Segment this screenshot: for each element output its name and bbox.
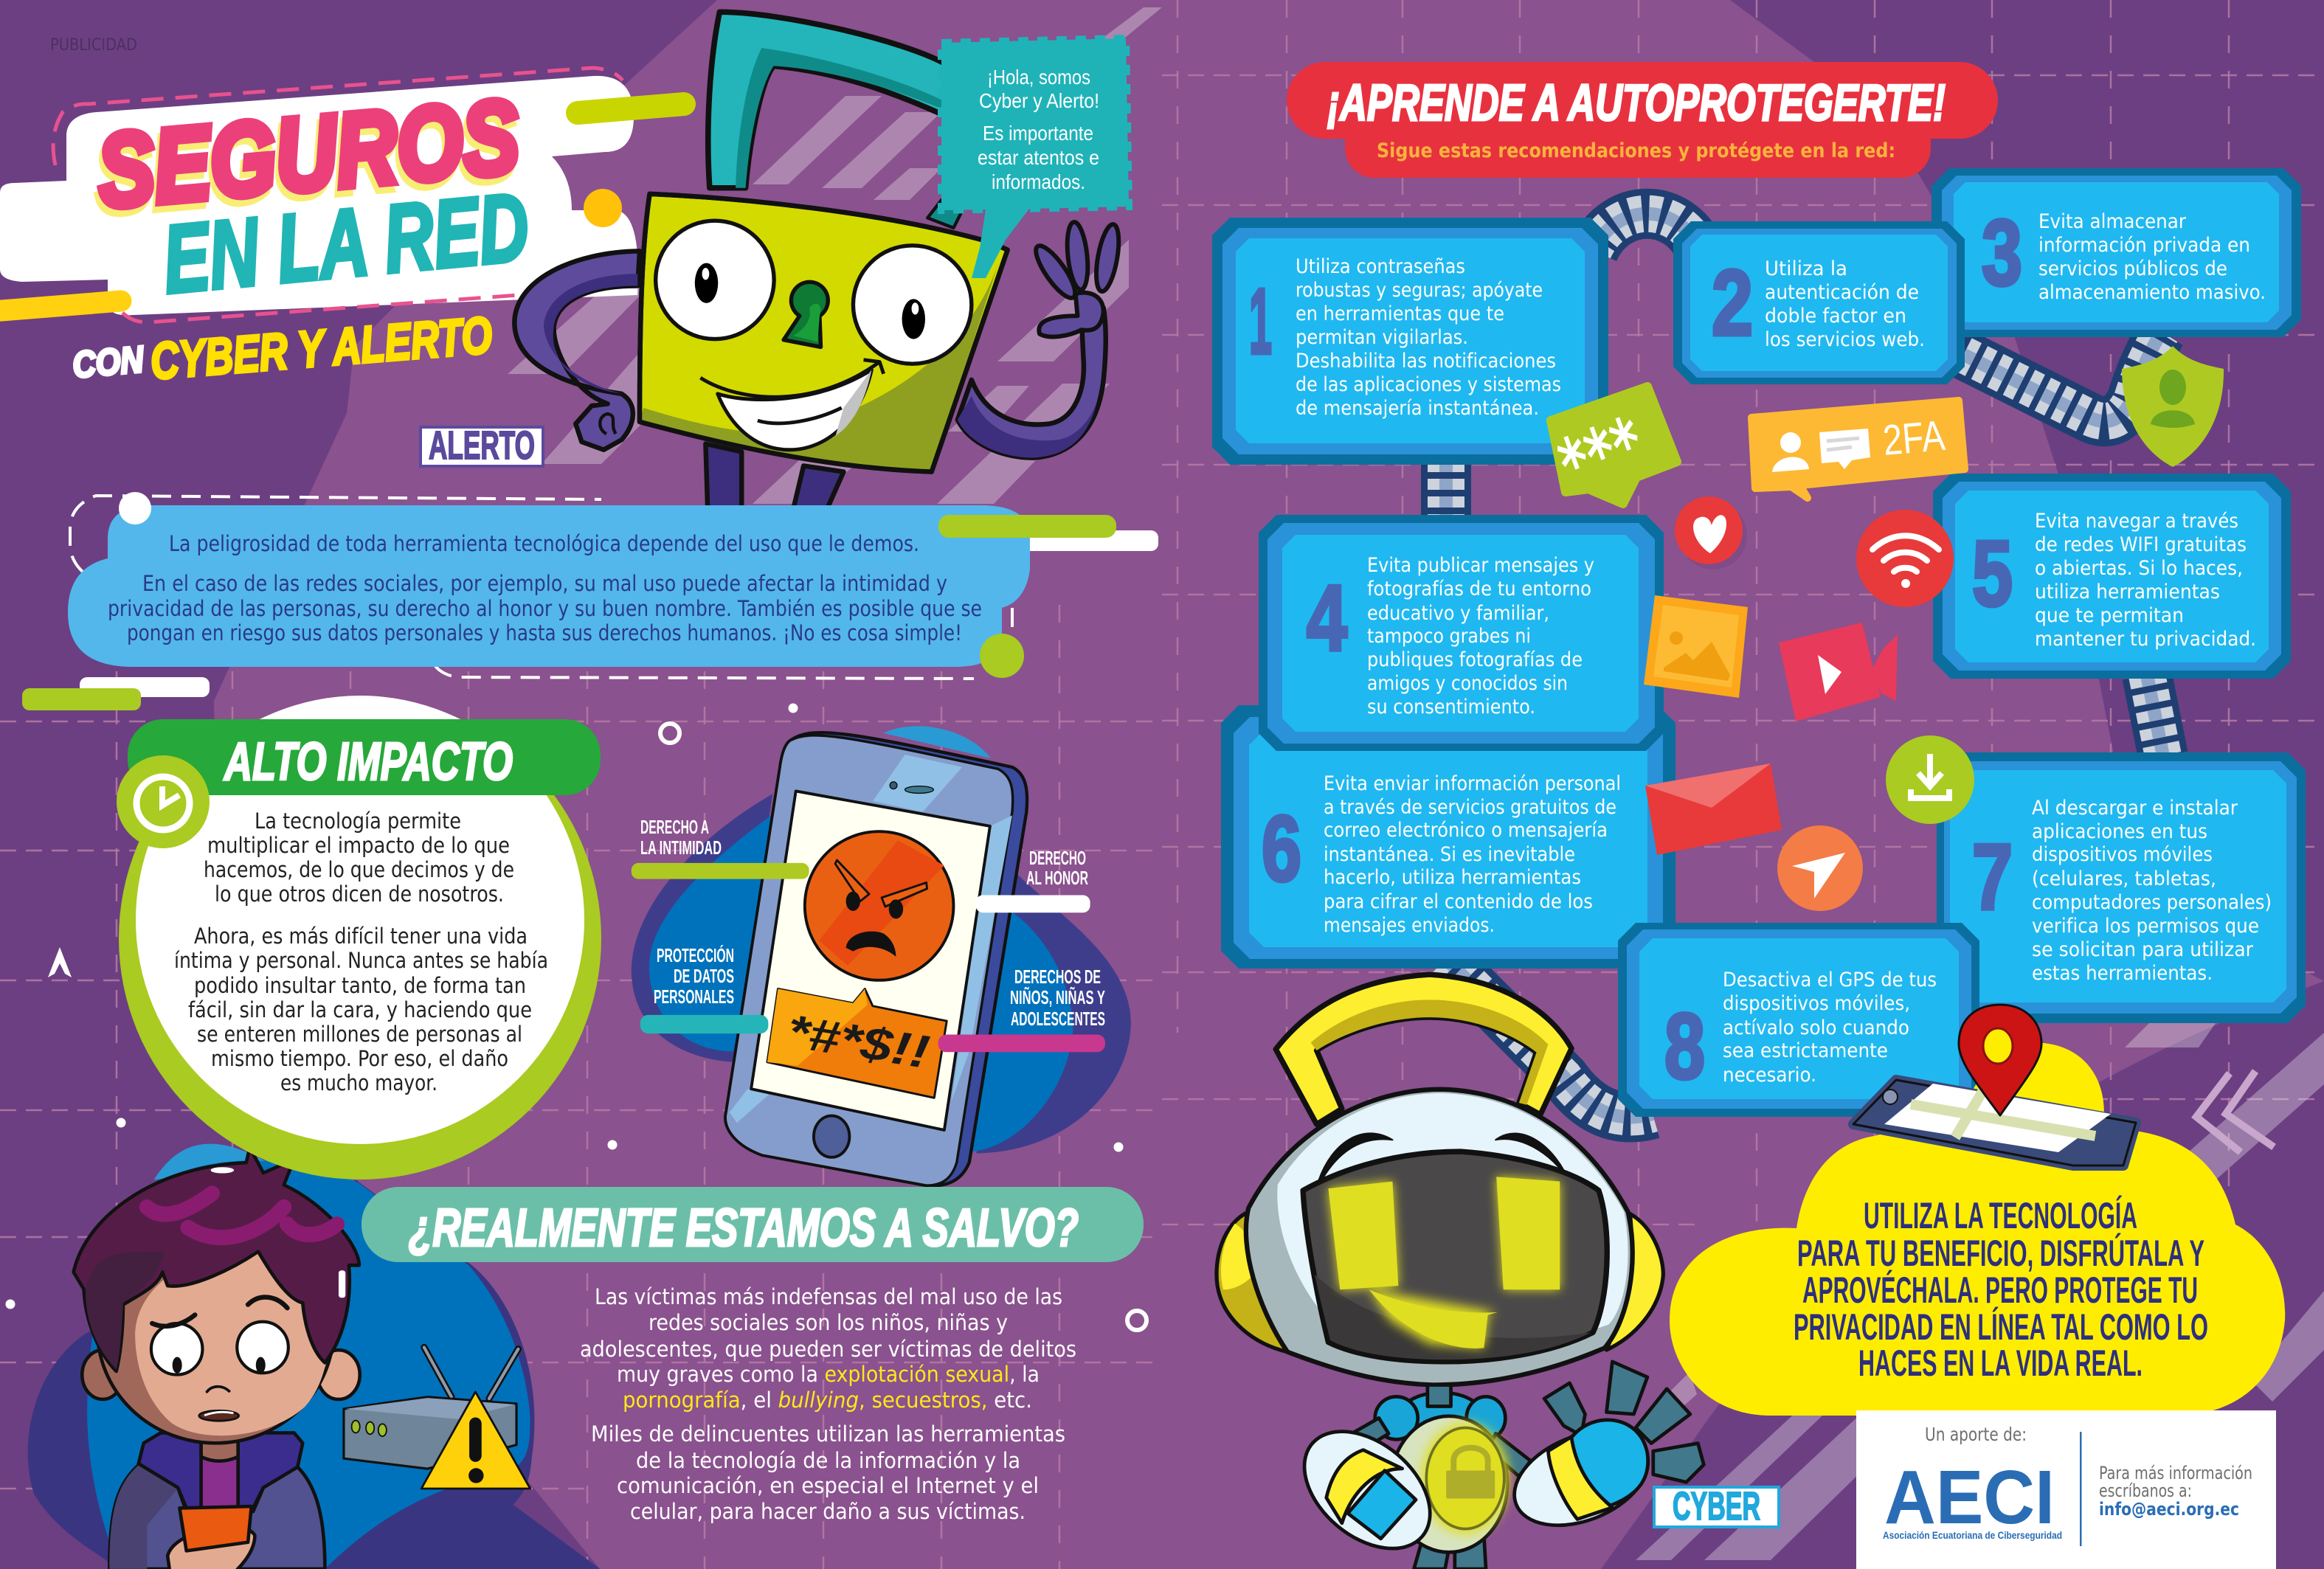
heading: alto impacto (128, 719, 601, 795)
step 1 card: Deshabilita las notificaciones (1296, 350, 1556, 373)
step 5 card: utiliza herramientas (2035, 581, 2220, 603)
step 1 card: robustas y seguras; apóyate (1296, 279, 1543, 302)
subtitle: con cyber y alerto (71, 306, 494, 390)
step 7 card: (celulares, tabletas, (2032, 867, 2216, 890)
step 7 card: verifica los permisos que (2032, 915, 2259, 938)
contact: escríbanos a: (2099, 1480, 2192, 1501)
phone body (725, 732, 1027, 1185)
step 3 card: 3 (1982, 201, 2022, 305)
illustration: Cyber robot (1217, 974, 1704, 1569)
title backdrop (0, 76, 638, 315)
title line: en la red: EN LA RED (159, 173, 533, 314)
title line: seguros: SEGUROS (90, 84, 520, 236)
step 2 card: doble factor en (1765, 305, 1906, 328)
alto impacto text: La tecnología permite (255, 808, 461, 834)
speech bubble text: informados. (992, 170, 1085, 193)
alto impacto text: es mucho mayor. (280, 1070, 438, 1095)
step 7 card: computadores personales) (2032, 891, 2272, 914)
speech bubble: Alerto (941, 38, 1129, 278)
name tag: Alerto (421, 423, 543, 468)
step 4 card: tampoco grabes ni (1367, 625, 1531, 648)
callout text: UTILIZA LA TECNOLOGÍA (1864, 1195, 2137, 1236)
alto impacto text: Ahora, es más difícil tener una vida (194, 924, 528, 949)
rails connecting the steps (1446, 214, 2163, 1117)
step 4 card: fotografías de tu entorno (1367, 578, 1591, 600)
step 6 card: instantánea. Si es inevitable (1324, 843, 1575, 866)
step 6 card: 6 (1262, 797, 1301, 901)
decorative dots (6, 704, 1147, 1508)
hand and phone (167, 1506, 255, 1569)
smile (700, 360, 884, 450)
router (344, 1348, 518, 1469)
earmuffs (1217, 1212, 1663, 1352)
illustration: phone with map pin (1853, 1005, 2136, 1166)
step 8 card (1618, 923, 1979, 1117)
callout text: HACES EN LA VIDA REAL. (1858, 1343, 2143, 1384)
alto impacto text: mismo tiempo. Por eso, el daño (211, 1046, 508, 1071)
heading: aprende a autoprotegerte (1287, 62, 1998, 178)
speech bubble text: estar atentos e (978, 146, 1099, 169)
rights labels: AL HONOR (1026, 867, 1088, 889)
step 5 card: que te permitan (2035, 604, 2184, 627)
step 7 card: dispositivos móviles (2032, 843, 2213, 866)
step 3 card: Evita almacenar (2038, 210, 2187, 233)
sponsor box: AECI (1856, 1410, 2276, 1569)
padlock emblem (1446, 1448, 1495, 1499)
alto impacto text (174, 808, 548, 1095)
step 6 card: hacerlo, utiliza herramientas (1324, 866, 1581, 889)
step 1 card: de las aplicaciones y sistemas (1296, 373, 1561, 396)
right arm and hand (958, 221, 1123, 458)
icon: envelope (1645, 763, 1782, 855)
step 6 card: para cifrar el contenido de los (1324, 890, 1593, 913)
text: victims: celular, para hacer daño a sus víctimas. (630, 1499, 1026, 1524)
rights labels: DERECHO A (640, 816, 709, 838)
step 8 card: actívalo solo cuando (1723, 1016, 1909, 1039)
swearing speech bubble (767, 988, 947, 1098)
step 1 card: 1 (1249, 269, 1272, 373)
logo: AECI: Asociación Ecuatoriana de Ciberseguridad (1883, 1529, 2062, 1541)
intro text (108, 531, 982, 645)
rights labels: DERECHO (1029, 847, 1086, 869)
step 1 card: permitan vigilarlas. (1296, 326, 1468, 349)
step 2 card (1673, 221, 1965, 384)
step 6 card: Evita enviar información personal (1324, 772, 1621, 795)
alto impacto text: íntima y personal. Nunca antes se había (174, 948, 548, 973)
step 5 card: 5 (1972, 522, 2013, 626)
name tag: Alerto: ALERTO (429, 423, 535, 468)
name tag: Cyber: CYBER (1673, 1484, 1760, 1528)
title line: seguros: SEGUROS (93, 77, 523, 229)
step 4 card: amigos y conocidos sin (1367, 672, 1568, 695)
text: victims: Miles de delincuentes utilizan las herramientas (591, 1421, 1065, 1447)
text: victims: comunicación, en especial el Internet y el (617, 1473, 1039, 1498)
alto impacto text: se enteren millones de personas al (197, 1022, 522, 1047)
speech bubble text: Cyber y Alerto! (979, 89, 1099, 112)
step 3 card (1932, 168, 2301, 337)
illustration: angry phone with rights (632, 726, 1131, 1185)
robot body (1375, 1385, 1531, 1569)
step 7 card (1937, 752, 2306, 1023)
icon: wifi (1856, 510, 1954, 607)
rights labels: DE DATOS (674, 965, 734, 987)
step 5 card: Evita navegar a través (2035, 510, 2238, 533)
rights labels: PERSONALES (654, 986, 734, 1008)
step 2 card: 2 (1712, 251, 1753, 355)
rights labels: LA INTIMIDAD (640, 837, 722, 859)
padlock shackle (708, 12, 961, 228)
step 5 card: o abiertas. Si lo haces, (2035, 557, 2243, 580)
step 1 card: en herramientas que te (1296, 302, 1504, 325)
face (151, 1297, 288, 1421)
illustration: boy with phone and router (28, 1144, 600, 1569)
step 4 card: su consentimiento. (1367, 696, 1535, 718)
step 3 card: servicios públicos de (2038, 257, 2227, 280)
text: victims (580, 1284, 1076, 1524)
alto impacto text: multiplicar el impacto de lo que (207, 833, 510, 858)
step 4 card (1259, 515, 1664, 751)
step 7 card: estas herramientas. (2032, 962, 2213, 985)
rights labels: NIÑOS, NIÑAS Y (1010, 986, 1105, 1008)
step 5 card: mantener tu privacidad. (2035, 628, 2256, 651)
left arm (514, 251, 640, 450)
intro text: La peligrosidad de toda herramienta tecnológica depende del uso que le demos. (169, 531, 919, 556)
step 2 card: Utiliza la (1765, 257, 1847, 280)
blobs (632, 726, 1131, 1153)
alto impacto text: lo que otros dicen de nosotros. (215, 882, 504, 907)
rights labels (640, 816, 1105, 1030)
text: victims: pornografía, el bullying, secuestros, etc. (623, 1388, 1032, 1413)
step 1 card (1212, 218, 1608, 465)
rights labels: PROTECCIÓN (657, 944, 734, 966)
step 4 card: 4 (1307, 566, 1347, 670)
rights labels: DERECHOS DE (1014, 966, 1101, 988)
handle (1276, 974, 1571, 1124)
head (82, 1217, 360, 1443)
heading: realmente estamos a salvo: ¿REALMENTE ESTAMOS A SALVO? (409, 1199, 1079, 1258)
contact: Para más información (2099, 1463, 2252, 1483)
subheading: Sigue estas recomendaciones y protégete en la red: (1377, 139, 1895, 162)
rights labels: ADOLESCENTES (1011, 1008, 1105, 1030)
icon: video (1779, 623, 1898, 721)
step 8 card: 8 (1664, 994, 1705, 1098)
callout text (1794, 1195, 2208, 1384)
background blobs (28, 1144, 600, 1569)
speech bubble text: Es importante (983, 122, 1093, 145)
step 1 card: Utiliza contraseñas (1296, 255, 1465, 278)
icon: navigation (1777, 825, 1863, 911)
step 2 card: los servicios web. (1765, 328, 1925, 351)
rights bars (632, 863, 1105, 1052)
icon: password bubble: *** (1548, 400, 1655, 510)
subtitle: con cyber y alerto: CYBER Y ALERTO (148, 306, 494, 390)
credit: Un aporte de: (1925, 1424, 2027, 1445)
icon: heart (1675, 496, 1747, 569)
step 1 card: de mensajería instantánea. (1296, 397, 1539, 420)
contact (2099, 1463, 2252, 1520)
text: victims: muy graves como la explotación sexual, la (617, 1362, 1040, 1387)
step 6 card: mensajes enviados. (1324, 914, 1495, 937)
text: publicidad: PUBLICIDAD (50, 36, 137, 55)
alto impacto text: fácil, sin dar la cara, y haciendo que (188, 997, 532, 1022)
intro panel (22, 492, 1158, 710)
swearing speech bubble: *#*$!! (784, 1005, 933, 1078)
step 7 card: 7 (1972, 825, 2013, 929)
helmet (1246, 1090, 1633, 1385)
hair (74, 1147, 359, 1371)
step 4 card: publiques fotografías de (1367, 648, 1583, 671)
angry emoji (805, 831, 953, 980)
padlock body (640, 194, 1008, 472)
speech bubble text: ¡Hola, somos (987, 66, 1090, 89)
panel: alto impacto (117, 696, 601, 1180)
title block (0, 68, 684, 390)
step 6 card: correo electrónico o mensajería (1324, 819, 1608, 842)
legs (705, 444, 843, 508)
intro text: privacidad de las personas, su derecho al honor y su buen nombre. También es posible que se (108, 596, 982, 621)
heading: aprende a autoprotegerte: ¡APRENDE A AUTOPROTEGERTE! (1327, 74, 1946, 131)
alto impacto text: podido insultar tanto, de forma tan (194, 973, 526, 998)
icon: 2FA bubble (1751, 401, 1965, 498)
warning triangle (421, 1392, 530, 1489)
step 8 card: sea estrictamente (1723, 1039, 1888, 1062)
step 5 card (1933, 474, 2291, 679)
character: Alerto padlock (514, 12, 1123, 508)
heading: realmente estamos a salvo (362, 1187, 1144, 1262)
step 3 card: almacenamiento masivo. (2038, 281, 2266, 304)
step 6 card (1221, 705, 1675, 969)
callout cloud (1670, 1043, 2285, 1416)
step 2 card: autenticación de (1765, 281, 1919, 304)
hoodie and neck (109, 1433, 325, 1569)
text: victims: redes sociales son los niños, niñas y (649, 1310, 1008, 1335)
contact: info@aeci.org.ec (2099, 1499, 2239, 1520)
heading: alto impacto: ALTO IMPACTO (224, 732, 513, 792)
step 3 card: información privada en (2038, 234, 2250, 257)
step 7 card: Al descargar e instalar (2032, 797, 2238, 820)
right fist and fingers (1501, 1362, 1704, 1543)
icon: shield (2122, 346, 2224, 467)
icon: 2FA bubble: 2FA (1881, 412, 1947, 465)
icon: clock (117, 755, 210, 848)
home button (814, 1116, 849, 1157)
step 4 card: Evita publicar mensajes y (1367, 554, 1594, 577)
text: victims: de la tecnología de la información y la (636, 1448, 1020, 1473)
icon: photo (1644, 595, 1748, 698)
text: victims: adolescentes, que pueden ser víctimas de delitos (580, 1337, 1076, 1362)
eyes (656, 221, 972, 364)
text: victims: Las víctimas más indefensas del mal uso de las (595, 1284, 1062, 1309)
subtitle: con cyber y alerto: CON (71, 339, 145, 386)
step 7 card: aplicaciones en tus (2032, 820, 2207, 843)
step 5 card: de redes WIFI gratuitas (2035, 533, 2247, 556)
step 4 card: educativo y familiar, (1367, 602, 1549, 625)
step 6 card: a través de servicios gratuitos de (1324, 796, 1616, 819)
intro text: En el caso de las redes sociales, por ejemplo, su mal uso puede afectar la intimidad y (142, 571, 947, 596)
name tag: Cyber (1654, 1484, 1779, 1528)
keyhole nose (784, 282, 828, 347)
speech bubble text (978, 66, 1099, 193)
icon: download (1886, 735, 1974, 824)
step 8 card: dispositivos móviles, (1723, 992, 1910, 1015)
step 7 card: se solicitan para utilizar (2032, 938, 2254, 961)
step 8 card: necesario. (1723, 1064, 1816, 1087)
step 8 card: Desactiva el GPS de tus (1723, 969, 1937, 991)
intro text: pongan en riesgo sus datos personales y hasta sus derechos humanos. ¡No es cosa simple! (127, 620, 962, 645)
alto impacto text: hacemos, de lo que decimos y de (204, 857, 514, 882)
left fist (1282, 1408, 1453, 1569)
visor (1303, 1151, 1607, 1362)
logo: AECI: AECI (1884, 1455, 2055, 1539)
chevrons (2196, 1071, 2274, 1152)
